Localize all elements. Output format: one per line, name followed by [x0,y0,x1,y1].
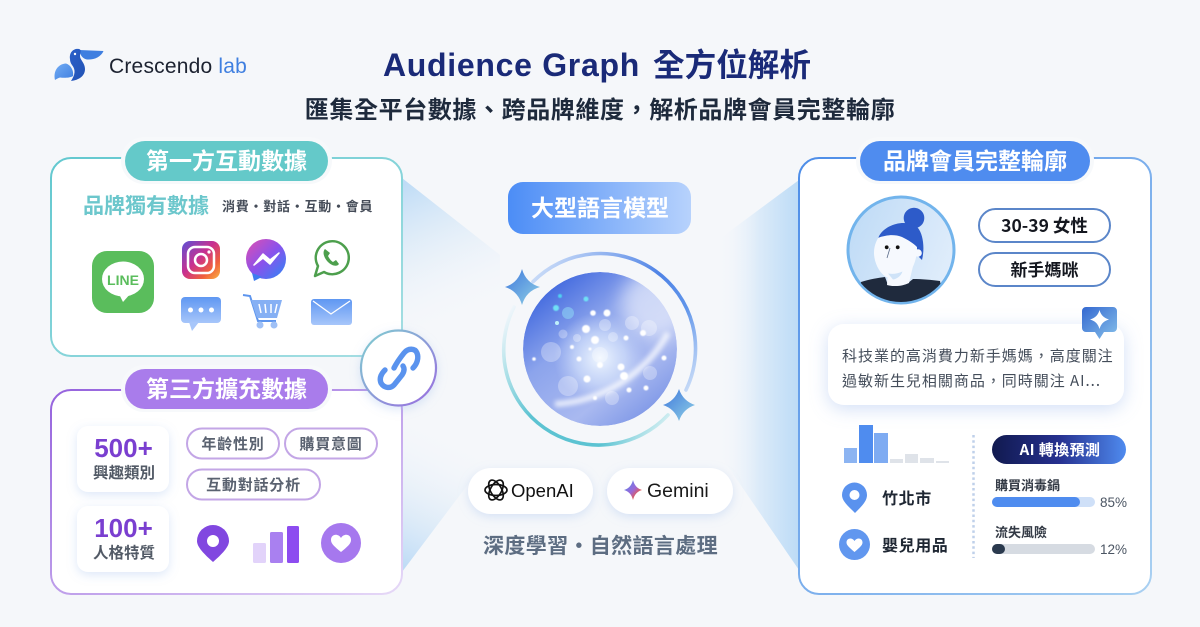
callout: AI persona summary: 過敏新生兒相關商品，同時關注 AI... [842,370,1101,391]
logo: Crescendo lab: Crescendo lab [109,55,247,78]
panel: first-party data [51,137,402,356]
badge: Gemini: Gemini [647,480,709,502]
icon: chat bubble [181,297,221,331]
chip: conversation analysis: 互動對話分析 [206,474,301,495]
icon: sparkle top left [505,269,540,305]
progress: churn risk 12%: 12% [1100,542,1127,557]
heading: first-party interaction data [121,137,332,184]
icon: sparkle bottom right [663,389,695,421]
chip: age and gender [979,209,1110,242]
chip: purchase intent [285,428,377,458]
icon: Messenger [246,239,286,281]
icon: blue heart [839,529,870,560]
icon: mail [311,299,352,325]
stat card: 100+ personality traits: 100+ [94,513,153,543]
text: Zhubei city: 竹北市 [882,485,932,509]
panel: third-party data [51,365,402,594]
subtitle: 匯集全平台數據、跨品牌維度，解析品牌會員完整輪廓 [305,90,895,125]
icon: AI sparkle badge [1082,307,1117,339]
icon: blue location pin [842,482,867,513]
light beam: left panels to model [402,178,500,572]
icon: purple heart [321,523,361,563]
heading: full brand member profile [856,137,1094,184]
chart: glowing data sphere [504,254,696,445]
badge: OpenAI [468,468,593,514]
chip: new mom: 新手媽咪 [1010,256,1078,281]
progress: buy sterilizer pot 85%: 購買消毒鍋 [995,475,1060,494]
heading: third-party enrichment data: 第三方擴充數據 [146,370,307,404]
progress: buy sterilizer pot 85% [992,475,1127,510]
heading: AI conversion prediction: AI 轉換預測 [1019,439,1100,460]
callout: AI persona summary [828,307,1124,405]
light beam: model to right panel [718,180,799,570]
text: deep learning and NLP: 深度學習・自然語言處理 [483,530,718,560]
heading: third-party enrichment data [121,365,332,412]
heading: large language model: 大型語言模型 [531,189,669,223]
chart: audience bars [844,425,949,463]
heading: AI conversion prediction [992,435,1126,464]
icon: link connector [361,330,436,406]
chip: age and gender: 30-39 女性 [1001,213,1088,238]
badge: Gemini [607,468,733,514]
stat card: 500+ interest categories: 興趣類別 [93,461,155,483]
stat card: 500+ interest categories: 500+ [94,433,153,463]
ring: upper arc [533,254,696,390]
ring: lower arc [504,307,668,445]
logo: Crescendo lab [55,49,247,81]
heading: large language model [508,182,691,234]
chip: age and gender: 年齡性別 [201,433,265,454]
icon: purple bars [253,526,299,563]
chip: purchase intent: 購買意圖 [299,433,363,454]
progress: churn risk 12% [992,522,1127,557]
icon: purple location pin [197,525,229,562]
chip: age and gender [187,428,279,458]
badge: OpenAI: OpenAI [511,480,574,501]
icon: LINE [92,251,154,313]
sphere [523,271,689,426]
title: Audience Graph [383,47,640,83]
text: brand proprietary data: 品牌獨有數據 [83,190,209,220]
title: 全方位解析 [653,47,811,83]
chip: conversation analysis [187,470,320,500]
icon: avatar [848,197,954,310]
stat card: 500+ interest categories [77,426,169,492]
icon: WhatsApp [315,241,349,276]
progress: buy sterilizer pot 85%: 85% [1100,495,1127,510]
heading: full brand member profile: 品牌會員完整輪廓 [883,142,1067,176]
icon: Instagram [182,241,220,279]
progress: churn risk 12%: 流失風險 [995,522,1047,541]
heading: first-party interaction data: 第一方互動數據 [146,142,307,176]
chip: new mom [979,253,1110,286]
icon: LINE: LINE [107,272,139,288]
stat card: 100+ personality traits [77,506,169,572]
callout: AI persona summary: 科技業的高消費力新手媽媽，高度關注 [842,345,1114,366]
panel: full brand member profile [799,137,1151,594]
text: baby products: 嬰兒用品 [882,532,948,556]
stat card: 100+ personality traits: 人格特質 [93,541,155,563]
icon: shopping cart [243,295,282,328]
text: data types: 消費・對話・互動・會員 [222,196,373,215]
